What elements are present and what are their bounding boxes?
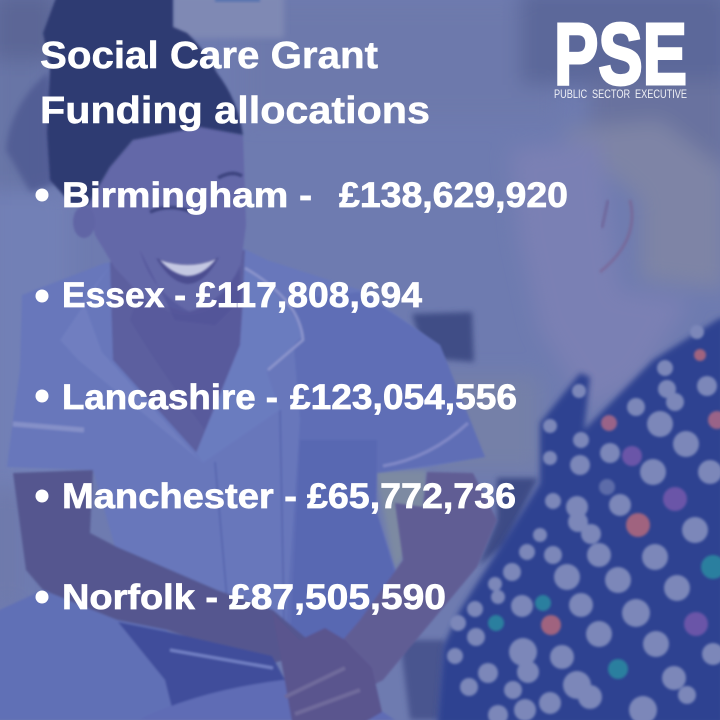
- dress polka dots: [447, 325, 720, 720]
- list item: Birmingham: [36, 175, 568, 215]
- uniform seams: [215, 462, 228, 610]
- sleeve cuff trims: [13, 424, 84, 430]
- list item: Essex: £117,808,694: [196, 275, 422, 315]
- list item: Manchester: £65,772,736: [307, 476, 516, 516]
- patient dress: [437, 318, 720, 720]
- list item: Essex: Essex -: [62, 275, 186, 315]
- wall object: [412, 312, 474, 362]
- chest and neck: [110, 250, 245, 453]
- lap: [0, 590, 175, 720]
- list item: Norfolk: £87,505,590: [229, 577, 446, 617]
- list item: Essex: [36, 275, 422, 315]
- nurse hair: [6, 0, 243, 205]
- uniform: [7, 247, 485, 660]
- right arm: [330, 472, 497, 700]
- face: [88, 125, 246, 312]
- eyes: [150, 173, 242, 212]
- title: [40, 35, 430, 132]
- title: Funding allocations: [40, 90, 430, 132]
- list item: Lancashire: Lancashire -: [62, 377, 278, 417]
- list item: Norfolk: [36, 577, 446, 617]
- hands: [272, 612, 382, 720]
- nurse figure: [0, 125, 497, 720]
- list item: Manchester: [36, 476, 516, 516]
- patient ear: [600, 200, 632, 272]
- list item: Norfolk: Norfolk -: [62, 577, 218, 617]
- title: Social Care Grant: [40, 35, 378, 77]
- collars: [196, 268, 304, 463]
- list item: Manchester: Manchester -: [62, 476, 297, 516]
- smile: [156, 257, 219, 284]
- left arm: [13, 470, 320, 664]
- list item: Lancashire: [36, 377, 517, 417]
- list item: Lancashire: £123,054,556: [290, 377, 517, 417]
- list item: Birmingham: Birmingham -: [62, 175, 312, 215]
- list item: Birmingham: £138,629,920: [339, 175, 568, 215]
